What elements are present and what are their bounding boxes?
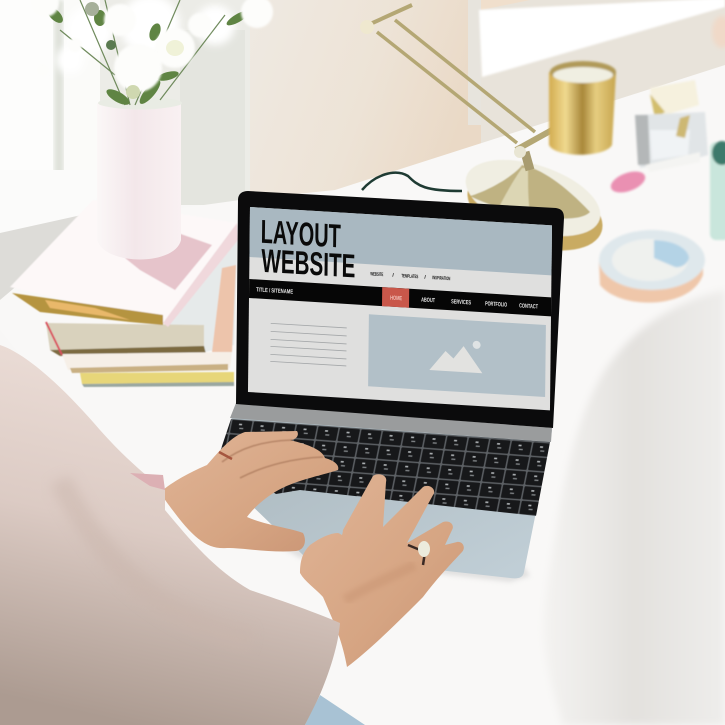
- gold candle: [549, 61, 616, 155]
- laptop shadow: [250, 530, 530, 582]
- nav labels: HOME: [390, 296, 402, 302]
- lamp base: [456, 145, 613, 266]
- mint cup: [710, 141, 725, 240]
- left hand: [163, 431, 338, 551]
- text placeholder lines: [270, 323, 347, 366]
- ring: [219, 452, 232, 459]
- screen page: [248, 207, 552, 410]
- hinge strip: [230, 403, 552, 442]
- hero band: [249, 207, 552, 275]
- soft white sprays: [56, 0, 235, 74]
- nav labels: PORTFOLIO: [485, 301, 507, 309]
- laptop screen layout: [248, 207, 552, 410]
- stems: [60, 0, 225, 105]
- desk lamp: [360, 5, 613, 266]
- nav labels: TITLE / SITENAME: [256, 287, 293, 296]
- nav labels: ABOUT: [421, 297, 435, 304]
- breadcrumb: /: [392, 273, 394, 279]
- right person's shoulder: [543, 290, 725, 725]
- top book: [10, 200, 237, 323]
- lamp joint: [360, 20, 374, 34]
- side books: [165, 225, 238, 352]
- breadcrumb: INSPIRATION: [432, 275, 451, 282]
- heading: [260, 213, 356, 284]
- lamp arms: [368, 5, 568, 170]
- jeans strip: [305, 695, 365, 725]
- finger creases: [222, 440, 323, 478]
- ring with stone: [408, 541, 430, 565]
- pink eraser: [608, 167, 648, 197]
- yellow book: [80, 372, 234, 384]
- tape roll: [599, 230, 705, 303]
- nav labels: [256, 287, 538, 311]
- flowers: [31, 0, 273, 108]
- cream book: [46, 323, 204, 350]
- left sleeve: [0, 345, 340, 725]
- breadcrumb: TEMPLATES: [401, 273, 419, 280]
- vase: [97, 97, 182, 260]
- nav labels: SERVICES: [451, 299, 471, 306]
- laptop: [215, 191, 564, 582]
- active tab: [382, 287, 409, 308]
- nav labels: CONTACT: [519, 303, 538, 311]
- stack of books: [10, 200, 238, 387]
- heading: WEBSITE: [261, 242, 356, 284]
- laptop base: [215, 405, 552, 578]
- nav bar: [249, 279, 551, 316]
- perfume bottle: [635, 80, 708, 172]
- bezel: [236, 191, 564, 428]
- breadcrumb: [370, 271, 451, 282]
- image placeholder: [368, 314, 546, 397]
- blossoms: [31, 0, 273, 92]
- leaves: [44, 4, 251, 108]
- lamp cord: [362, 173, 462, 191]
- heading: LAYOUT: [261, 213, 341, 255]
- third book: [62, 352, 232, 370]
- cuff: [130, 473, 165, 490]
- breadcrumb: /: [424, 275, 426, 281]
- right hand: [300, 474, 464, 667]
- keyboard: [218, 419, 550, 516]
- breadcrumb: WEBSITE: [370, 271, 384, 278]
